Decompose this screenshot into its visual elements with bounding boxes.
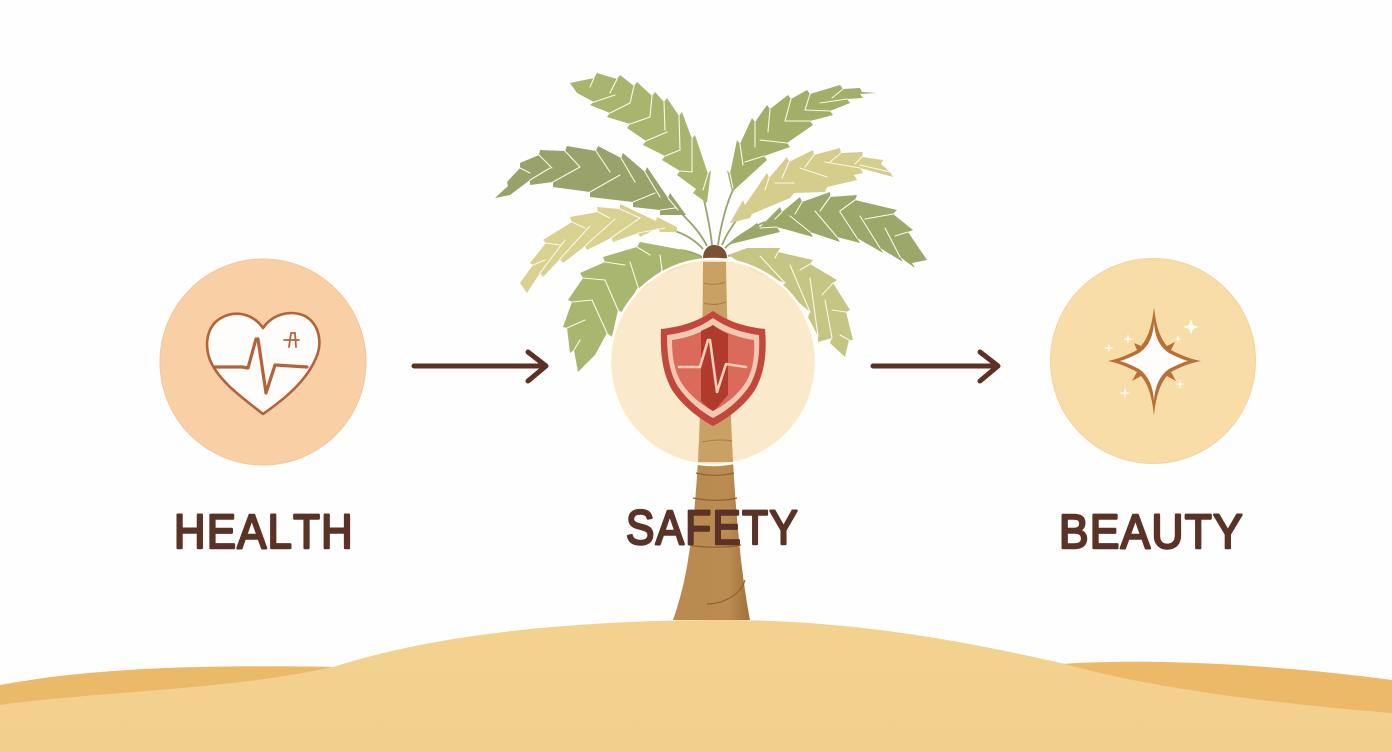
- panel: beauty: [1050, 258, 1256, 559]
- beauty circle: [1050, 258, 1256, 464]
- trunk: [673, 258, 750, 620]
- safety circle: [610, 259, 816, 465]
- arrow: health to safety: [414, 352, 546, 381]
- health circle: [160, 259, 366, 465]
- frond: lower right: [728, 248, 853, 357]
- frond stems: [672, 190, 765, 257]
- trunk seen through circle: [698, 262, 733, 462]
- frond: top left: [570, 73, 711, 203]
- frond: lower left pale: [520, 204, 677, 293]
- panel: health: [160, 259, 366, 559]
- frond: top right: [727, 85, 877, 192]
- back dune: right: [1060, 662, 1392, 730]
- back dune: left: [0, 666, 340, 720]
- label: health: HEALTH: [174, 506, 354, 559]
- sparkles: [1104, 319, 1199, 399]
- front dune: [0, 620, 1392, 752]
- icon: sparkle star: [1104, 307, 1201, 416]
- trunk rings: [689, 473, 745, 604]
- label: beauty: BEAUTY: [1059, 506, 1244, 559]
- frond: right: [727, 192, 927, 268]
- panel: safety: [610, 259, 816, 555]
- icon: shield with pulse: [661, 311, 766, 426]
- arrow: safety to beauty: [873, 352, 998, 381]
- frond: left: [495, 146, 686, 215]
- label: safety: SAFETY: [626, 502, 799, 555]
- palm tree: [495, 73, 927, 620]
- frond: upper right pale: [730, 148, 907, 223]
- trunk crown: [703, 245, 727, 258]
- icon: heart with pulse: [207, 313, 319, 414]
- frond: lower left green: [563, 242, 702, 372]
